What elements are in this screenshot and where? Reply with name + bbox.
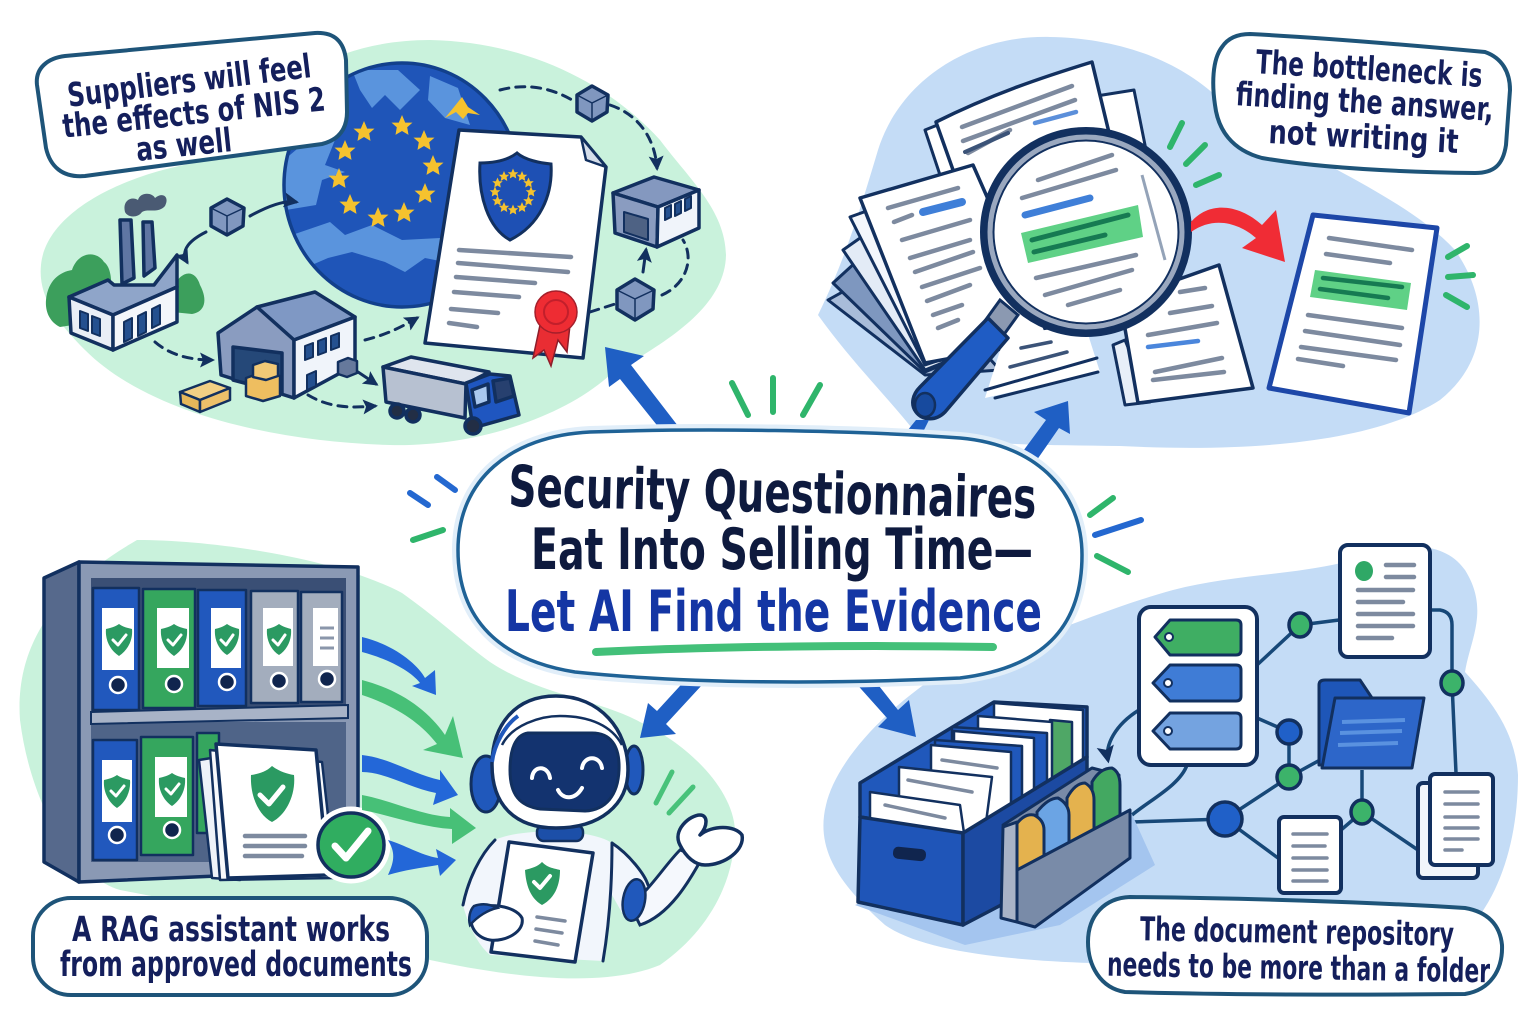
callout: suppliers — [37, 33, 347, 176]
icon: small warehouse right — [613, 177, 699, 247]
arrow: centre to repository — [853, 672, 916, 737]
icon: factory — [69, 220, 177, 350]
callout: bottleneck — [1213, 34, 1510, 173]
icon: lens page content — [1021, 155, 1165, 305]
illustration: document search — [828, 62, 1473, 419]
icon: blue folder — [1319, 680, 1424, 768]
robot raised arm and hand — [620, 815, 742, 925]
icon: fanned papers — [828, 165, 1050, 375]
icon: approved document stack — [199, 744, 335, 880]
icon: certificate document — [425, 130, 606, 366]
icon: cardboard boxes — [180, 358, 357, 412]
robot held document — [491, 842, 593, 962]
title text: Eat Into Selling Time— — [531, 517, 1033, 583]
arrow: centre to RAG assistant — [640, 675, 702, 738]
panel: bottleneck background blob — [818, 37, 1480, 448]
icon: document pile behind — [925, 62, 1150, 260]
callout: RAG assistant: A RAG assistant works — [72, 910, 390, 950]
callout: suppliers: Suppliers will feel — [65, 46, 313, 115]
icon: factory smoke — [124, 194, 167, 216]
illustration: RAG assistant with approved documents — [44, 562, 742, 962]
arrows: documents flowing to robot — [362, 637, 476, 876]
title text: Let AI Find the Evidence — [505, 579, 1042, 645]
panel: suppliers background blob — [41, 40, 726, 445]
title callout — [458, 430, 1082, 682]
box papers — [870, 703, 1083, 850]
callout: bottleneck: not writing it — [1268, 112, 1459, 161]
icon: robot assistant — [463, 696, 742, 962]
icon: network bottom document — [1279, 817, 1341, 893]
panel: RAG background blob — [20, 540, 735, 978]
icon: robot sparkle marks — [656, 772, 693, 813]
icon: binders top row — [93, 588, 342, 710]
icon: bookshelf — [44, 562, 358, 882]
icon: EU shield — [480, 153, 551, 240]
illustration: structured document repository — [855, 545, 1493, 945]
icon: repository shadow — [855, 810, 1155, 945]
callout: RAG assistant — [33, 898, 427, 995]
callout: suppliers: the effects of NIS 2 — [60, 79, 327, 146]
network links — [1107, 610, 1456, 858]
robot body — [463, 825, 648, 961]
callout: RAG assistant: from approved documents — [60, 945, 412, 985]
icon: network document stack — [1418, 774, 1493, 878]
arrow: centre to document search — [903, 401, 1070, 467]
illustration: supply chain and NIS 2 — [46, 63, 699, 434]
title green underline — [596, 646, 993, 652]
icon: magnifying glass — [913, 131, 1188, 419]
arrows: dashed supply chain links — [155, 87, 688, 407]
robot lower hand — [469, 904, 522, 940]
icon: grey folder holder — [1001, 768, 1130, 927]
network nodes — [1208, 613, 1463, 836]
callout: suppliers: as well — [134, 120, 234, 169]
sparkle marks around title — [410, 378, 1141, 572]
icon: parcel cube top — [577, 86, 608, 121]
title text: Security Questionnaires — [508, 454, 1037, 532]
icon: result document — [1269, 215, 1437, 413]
icon: parcel cube right — [617, 279, 654, 320]
icon: parcel cube left — [211, 199, 244, 235]
callout: repository — [1088, 897, 1502, 995]
icon: binder shields — [104, 624, 291, 808]
icon: green sparkle marks — [1170, 123, 1473, 307]
robot head — [471, 696, 643, 828]
arrow: centre to suppliers — [605, 347, 678, 434]
arrow: red curved — [1191, 208, 1285, 262]
icon: network top document — [1340, 545, 1430, 657]
icon: bushes — [46, 254, 204, 327]
panel: repository background blob — [823, 547, 1518, 965]
icon: small paper right — [1113, 265, 1253, 405]
icon: delivery truck — [383, 357, 519, 434]
icon: lower paper under handle — [985, 325, 1100, 398]
icon: blue file box — [858, 702, 1087, 925]
icon: red seal ribbon — [533, 291, 577, 366]
icon: green check badge — [315, 810, 387, 880]
icon: EU globe — [284, 63, 520, 307]
icon: warehouse — [218, 292, 355, 398]
icon: binders bottom row — [93, 733, 219, 860]
icon: tag card — [1139, 607, 1257, 765]
title text — [505, 454, 1042, 645]
